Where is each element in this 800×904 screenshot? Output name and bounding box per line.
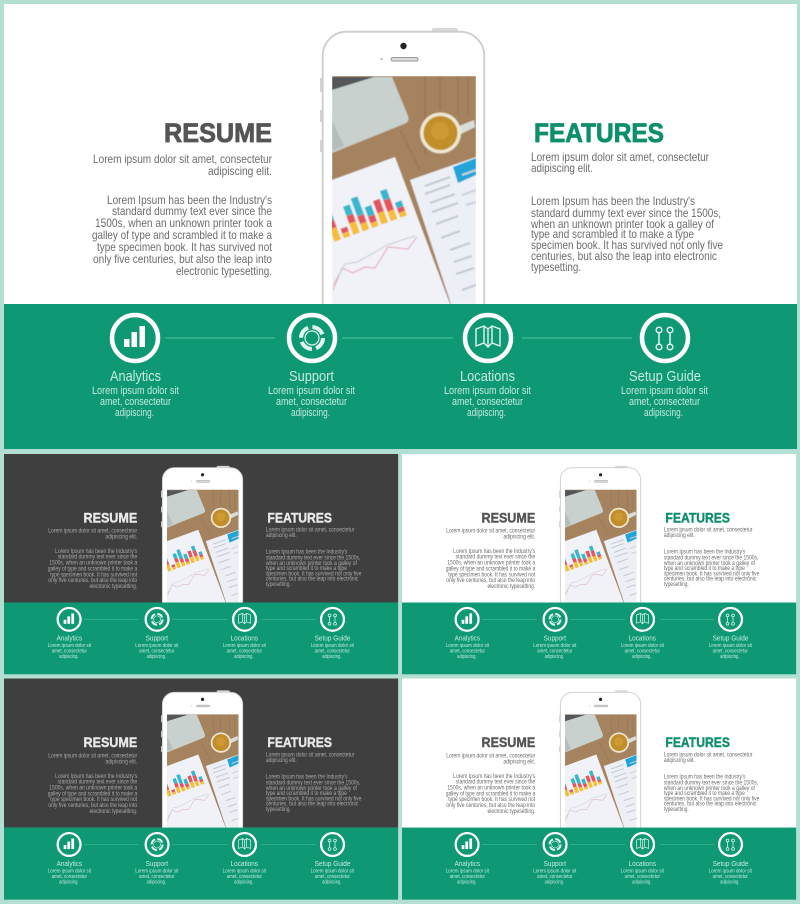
panel: dark slide bottom: adipiscing. xyxy=(234,879,254,885)
panel: main slide xyxy=(4,4,797,449)
panel: light slide bottom: Locations xyxy=(629,859,656,868)
panel: light slide top: Setup Guide xyxy=(713,634,748,643)
feature: analytics: adipiscing. xyxy=(115,407,154,419)
panel: light slide bottom: Lorem ipsum dolor sit amet, consectetur xyxy=(664,753,752,759)
text block: resume: type specimen book. It has survived not xyxy=(97,240,273,254)
panel: light slide bottom: adipiscing. xyxy=(720,879,740,885)
panel: dark slide top: when an unknown printer took a galley of xyxy=(265,561,357,567)
panel: light slide top: Lorem ipsum dolor sit xyxy=(446,643,489,649)
text block: features: centuries, but also the leap into electronic xyxy=(531,249,717,263)
phone with desk photo xyxy=(320,28,484,332)
panel: light slide top: when an unknown printer took a galley of xyxy=(663,561,755,567)
panel: dark slide top: adipiscing. xyxy=(234,654,254,660)
panel: dark slide bottom: Lorem Ipsum has been the Industry's xyxy=(55,774,137,780)
panel: light slide bottom: adipiscing elit. xyxy=(503,759,535,765)
panel: light slide bottom: Analytics xyxy=(455,859,480,868)
panel: dark slide bottom: adipiscing. xyxy=(147,879,166,885)
panel: light slide bottom: Lorem ipsum dolor sit xyxy=(709,868,752,874)
panel: dark slide bottom: adipiscing elit. xyxy=(266,758,297,764)
text block: resume: adipiscing elit. xyxy=(208,164,272,178)
icon: analytics xyxy=(112,315,158,361)
panel: light slide top: 1500s, when an unknown printer took a xyxy=(447,560,536,566)
panel: dark slide top: standard dummy text ever since the xyxy=(58,554,138,560)
panel: light slide top: galley of type and scrambled it to make a xyxy=(446,566,536,572)
text block: features: standard dummy text ever since the 1500s, xyxy=(531,206,721,220)
panel: dark slide bottom: amet, consectetur xyxy=(52,874,87,880)
panel: dark slide top: Lorem Ipsum has been the Industry's xyxy=(55,549,137,555)
panel: dark slide bottom: Lorem ipsum dolor sit xyxy=(223,868,266,874)
panel: dark slide top: Setup Guide xyxy=(315,634,350,643)
heading: features: FEATURES xyxy=(534,118,664,148)
panel: light slide top: FEATURES xyxy=(665,510,730,525)
feature: setup guide: amet, consectetur xyxy=(629,396,700,408)
panel: light slide top: amet, consectetur xyxy=(450,649,485,654)
panel: light slide bottom: typesetting. xyxy=(664,807,689,813)
panel: dark slide top: adipiscing elit. xyxy=(266,533,297,539)
panel: light slide bottom: galley of type and scrambled it to make a xyxy=(446,791,536,797)
text block: resume: electronic typesetting. xyxy=(176,264,272,278)
panel: dark slide top: type specimen book. It has survived not xyxy=(50,572,137,578)
panel: light slide bottom: specimen book. It has survived not only five xyxy=(664,796,760,802)
text block: resume: Lorem Ipsum has been the Industry's xyxy=(107,193,272,207)
panel: dark slide top: FEATURES xyxy=(267,510,332,525)
panel: dark slide bottom: electronic typesetting. xyxy=(89,809,137,815)
panel: light slide top: typesetting. xyxy=(664,582,689,588)
feature: support: Support xyxy=(289,368,335,385)
feature: support: adipiscing. xyxy=(291,407,330,419)
panel: light slide top: adipiscing elit. xyxy=(664,533,695,539)
panel: light slide top: adipiscing. xyxy=(632,654,652,660)
panel: light slide bottom xyxy=(402,678,796,900)
panel: light slide top: Lorem ipsum dolor sit amet, consectetur xyxy=(664,528,752,534)
panel: dark slide top: adipiscing. xyxy=(322,654,342,660)
panel: light slide bottom: only five centuries, but also the leap into xyxy=(446,803,536,809)
panel: light slide bottom: adipiscing elit. xyxy=(664,758,695,764)
panel: dark slide bottom: Lorem ipsum dolor sit xyxy=(311,868,354,874)
panel: light slide top: Lorem ipsum dolor sit xyxy=(621,643,664,649)
panel: light slide bottom: Lorem ipsum dolor sit xyxy=(533,868,577,874)
panel: dark slide top: amet, consectetur xyxy=(227,649,262,654)
panel: light slide top: only five centuries, but also the leap into xyxy=(446,578,536,584)
text block: features: specimen book. It has survived not only five xyxy=(531,238,723,252)
text block: resume: standard dummy text ever since the xyxy=(112,204,272,218)
panel: dark slide top: type and scrambled it to make a type xyxy=(266,566,348,572)
panel: dark slide bottom: typesetting. xyxy=(266,807,291,813)
panel: dark slide top: Support xyxy=(146,634,169,643)
panel: light slide bottom: FEATURES xyxy=(665,735,730,750)
panel: light slide top: specimen book. It has survived not only five xyxy=(664,571,760,577)
panel: light slide bottom: centuries, but also the leap into electronic xyxy=(664,802,756,808)
panel: dark slide bottom: Support xyxy=(146,859,169,868)
panel: light slide top: amet, consectetur xyxy=(713,649,748,654)
text block: features: typesetting. xyxy=(531,260,581,274)
feature: analytics: amet, consectetur xyxy=(100,396,171,408)
text block: features: Lorem ipsum dolor sit amet, consectetur xyxy=(531,150,709,164)
panel: dark slide bottom: specimen book. It has survived not only five xyxy=(266,796,362,802)
panel: light slide top: adipiscing. xyxy=(457,654,477,660)
panel: dark slide bottom: FEATURES xyxy=(267,735,332,750)
panel: light slide bottom: amet, consectetur xyxy=(625,874,660,880)
panel: light slide bottom: Lorem ipsum dolor sit amet, consectetur xyxy=(446,754,535,760)
panel: light slide bottom: Lorem ipsum dolor sit xyxy=(621,868,664,874)
panel: light slide bottom: adipiscing. xyxy=(632,879,652,885)
panel: light slide top: standard dummy text ever since the xyxy=(456,554,536,560)
panel: dark slide top: standard dummy text ever since the 1500s, xyxy=(266,555,361,561)
feature: setup guide: Setup Guide xyxy=(629,368,701,385)
panel: dark slide bottom: type and scrambled it to make a type xyxy=(266,791,347,797)
panel: dark slide top: centuries, but also the leap into electronic xyxy=(266,577,358,583)
panel: light slide bottom: electronic typesetting. xyxy=(487,809,535,815)
panel: dark slide bottom: Lorem ipsum dolor sit xyxy=(48,868,91,874)
panel: light slide bottom: amet, consectetur xyxy=(713,874,748,880)
panel: light slide bottom: standard dummy text ever since the 1500s, xyxy=(664,780,759,786)
panel: light slide bottom: when an unknown printer took a galley of xyxy=(663,786,755,792)
text block: features: Lorem Ipsum has been the Industry's xyxy=(531,194,695,208)
text block: features xyxy=(530,150,723,274)
feature: support xyxy=(268,368,355,419)
panel: dark slide top: 1500s, when an unknown printer took a xyxy=(49,560,138,566)
panel: dark slide bottom: Analytics xyxy=(57,859,82,868)
panel: dark slide bottom: Setup Guide xyxy=(315,859,350,868)
panel: dark slide top: typesetting. xyxy=(266,582,291,588)
panel: dark slide top: RESUME xyxy=(84,510,137,525)
panel: dark slide bottom: centuries, but also the leap into electronic xyxy=(266,802,358,808)
feature: setup guide xyxy=(621,368,708,419)
feature: setup guide: Lorem ipsum dolor sit xyxy=(621,385,708,397)
panel: dark slide bottom: when an unknown printer took a galley of xyxy=(265,786,357,792)
panel: dark slide bottom: adipiscing elit. xyxy=(105,759,137,765)
panel: dark slide bottom: Lorem Ipsum has been the Industry's xyxy=(266,774,347,780)
panel: dark slide top: amet, consectetur xyxy=(139,649,175,654)
panel: light slide bottom: Lorem Ipsum has been the Industry's xyxy=(664,774,745,780)
panel: dark slide top: specimen book. It has survived not only five xyxy=(266,571,362,577)
panel: dark slide bottom: type specimen book. It has survived not xyxy=(50,797,137,803)
panel: green feature band xyxy=(4,304,797,449)
panel: dark slide top: Lorem ipsum dolor sit xyxy=(223,643,266,649)
panel: dark slide top: Lorem ipsum dolor sit xyxy=(135,643,179,649)
panel: light slide bottom: amet, consectetur xyxy=(537,874,573,880)
panel: light slide top: centuries, but also the leap into electronic xyxy=(664,577,756,583)
heading: resume: RESUME xyxy=(164,118,272,148)
panel: dark slide top: Analytics xyxy=(57,634,82,643)
text block: resume: 1500s, when an unknown printer took a xyxy=(95,216,272,230)
panel: light slide bottom: type specimen book. It has survived not xyxy=(448,797,535,803)
panel: light slide top: type specimen book. It has survived not xyxy=(448,572,535,578)
panel: dark slide bottom: amet, consectetur xyxy=(139,874,175,880)
panel: light slide top: Support xyxy=(544,634,567,643)
panel: light slide top: RESUME xyxy=(482,510,535,525)
panel: light slide top: amet, consectetur xyxy=(537,649,573,654)
panel: light slide bottom: adipiscing. xyxy=(457,879,477,885)
panel: dark slide bottom: Lorem ipsum dolor sit amet, consectetur xyxy=(48,754,137,760)
panel: light slide top: Analytics xyxy=(455,634,480,643)
panel: dark slide bottom: amet, consectetur xyxy=(315,874,350,880)
panel: light slide bottom: type and scrambled it to make a type xyxy=(664,791,745,797)
panel: light slide bottom: Support xyxy=(544,859,567,868)
panel: light slide top: adipiscing. xyxy=(545,654,564,660)
panel: dark slide top: adipiscing. xyxy=(59,654,79,660)
text block: features: type and scrambled it to make a type xyxy=(531,227,694,241)
panel: dark slide bottom: Lorem ipsum dolor sit amet, consectetur xyxy=(266,753,354,759)
panel: dark slide bottom: amet, consectetur xyxy=(227,874,262,880)
panel: light slide bottom: Lorem ipsum dolor sit xyxy=(446,868,489,874)
panel: light slide top xyxy=(402,454,796,674)
panel: dark slide top: adipiscing. xyxy=(147,654,166,660)
panel: dark slide top: adipiscing elit. xyxy=(105,535,137,541)
panel: light slide top: Lorem ipsum dolor sit xyxy=(533,643,577,649)
panel: light slide bottom: standard dummy text ever since the xyxy=(456,779,536,785)
panel: light slide top: Locations xyxy=(629,634,656,643)
panel: dark slide top: Lorem ipsum dolor sit amet, consectetur xyxy=(266,528,354,534)
panel: dark slide bottom: galley of type and scrambled it to make a xyxy=(48,791,138,797)
panel: dark slide bottom: standard dummy text ever since the xyxy=(58,779,138,785)
panel: dark slide top: amet, consectetur xyxy=(315,649,350,654)
panel: dark slide top: Lorem ipsum dolor sit xyxy=(311,643,354,649)
panel: light slide bottom: RESUME xyxy=(482,735,535,750)
panel: dark slide top: Lorem Ipsum has been the Industry's xyxy=(266,550,347,555)
feature: setup guide: adipiscing. xyxy=(644,407,683,419)
feature: analytics: Lorem ipsum dolor sit xyxy=(92,385,179,397)
panel: dark slide bottom: Locations xyxy=(231,859,258,868)
panel: dark slide bottom: only five centuries, but also the leap into xyxy=(48,803,138,809)
panel: light slide top: Lorem ipsum dolor sit amet, consectetur xyxy=(446,529,535,535)
panel: dark slide bottom: RESUME xyxy=(84,735,137,750)
icon: setup guide xyxy=(642,315,688,361)
panel: light slide top: electronic typesetting. xyxy=(487,584,535,590)
feature: locations: adipiscing. xyxy=(467,407,506,419)
panel: light slide top: adipiscing elit. xyxy=(503,535,535,541)
text block: features: adipiscing elit. xyxy=(531,161,593,175)
panel: light slide bottom: adipiscing. xyxy=(545,879,564,885)
panel: light slide top: amet, consectetur xyxy=(625,649,660,654)
panel: light slide bottom: amet, consectetur xyxy=(450,874,485,880)
panel: light slide top: adipiscing. xyxy=(720,654,740,660)
panel: dark slide bottom xyxy=(4,678,398,900)
text block: resume: Lorem ipsum dolor sit amet, consectetur xyxy=(93,152,272,166)
panel: dark slide top: electronic typesetting. xyxy=(89,584,137,590)
panel: dark slide top: amet, consectetur xyxy=(52,649,87,654)
panel: light slide bottom: 1500s, when an unknown printer took a xyxy=(447,785,536,791)
panel: light slide top: Lorem Ipsum has been the Industry's xyxy=(664,550,745,555)
icon: locations xyxy=(465,315,511,361)
panel: dark slide bottom: adipiscing. xyxy=(59,879,79,885)
icon: support xyxy=(289,315,335,361)
panel: dark slide bottom: Lorem ipsum dolor sit xyxy=(135,868,179,874)
text block: resume: only five centuries, but also the leap into xyxy=(93,252,272,266)
panel: dark slide top: galley of type and scrambled it to make a xyxy=(48,566,138,572)
panel: dark slide bottom: adipiscing. xyxy=(322,879,342,885)
panel: dark slide bottom: standard dummy text ever since the 1500s, xyxy=(266,780,361,786)
panel: dark slide top: Lorem ipsum dolor sit xyxy=(48,643,91,649)
feature: locations: amet, consectetur xyxy=(452,396,523,408)
panel: dark slide top: only five centuries, but also the leap into xyxy=(48,578,138,584)
panel: light slide top: standard dummy text ever since the 1500s, xyxy=(664,555,759,561)
text block: resume: galley of type and scrambled it to make a xyxy=(92,228,272,242)
text block: resume xyxy=(92,152,273,278)
feature: locations xyxy=(444,368,531,419)
feature: analytics xyxy=(92,368,179,419)
feature: locations: Lorem ipsum dolor sit xyxy=(444,385,531,397)
panel: light slide top: Lorem ipsum dolor sit xyxy=(709,643,752,649)
panel: dark slide top xyxy=(4,454,398,674)
panel: light slide top: Lorem Ipsum has been the Industry's xyxy=(453,549,535,555)
feature: support: Lorem ipsum dolor sit xyxy=(268,385,355,397)
panel: dark slide bottom: 1500s, when an unknown printer took a xyxy=(49,785,138,791)
feature: analytics: Analytics xyxy=(110,368,161,385)
feature: support: amet, consectetur xyxy=(276,396,347,408)
panel: light slide top: type and scrambled it to make a type xyxy=(664,566,746,572)
panel: dark slide top: Lorem ipsum dolor sit amet, consectetur xyxy=(48,529,137,535)
panel: light slide bottom: Lorem Ipsum has been the Industry's xyxy=(453,774,535,780)
text block: features: when an unknown printer took a galley of xyxy=(530,217,715,231)
panel: light slide bottom: Setup Guide xyxy=(713,859,748,868)
feature: locations: Locations xyxy=(460,368,515,385)
panel: dark slide top: Locations xyxy=(231,634,258,643)
